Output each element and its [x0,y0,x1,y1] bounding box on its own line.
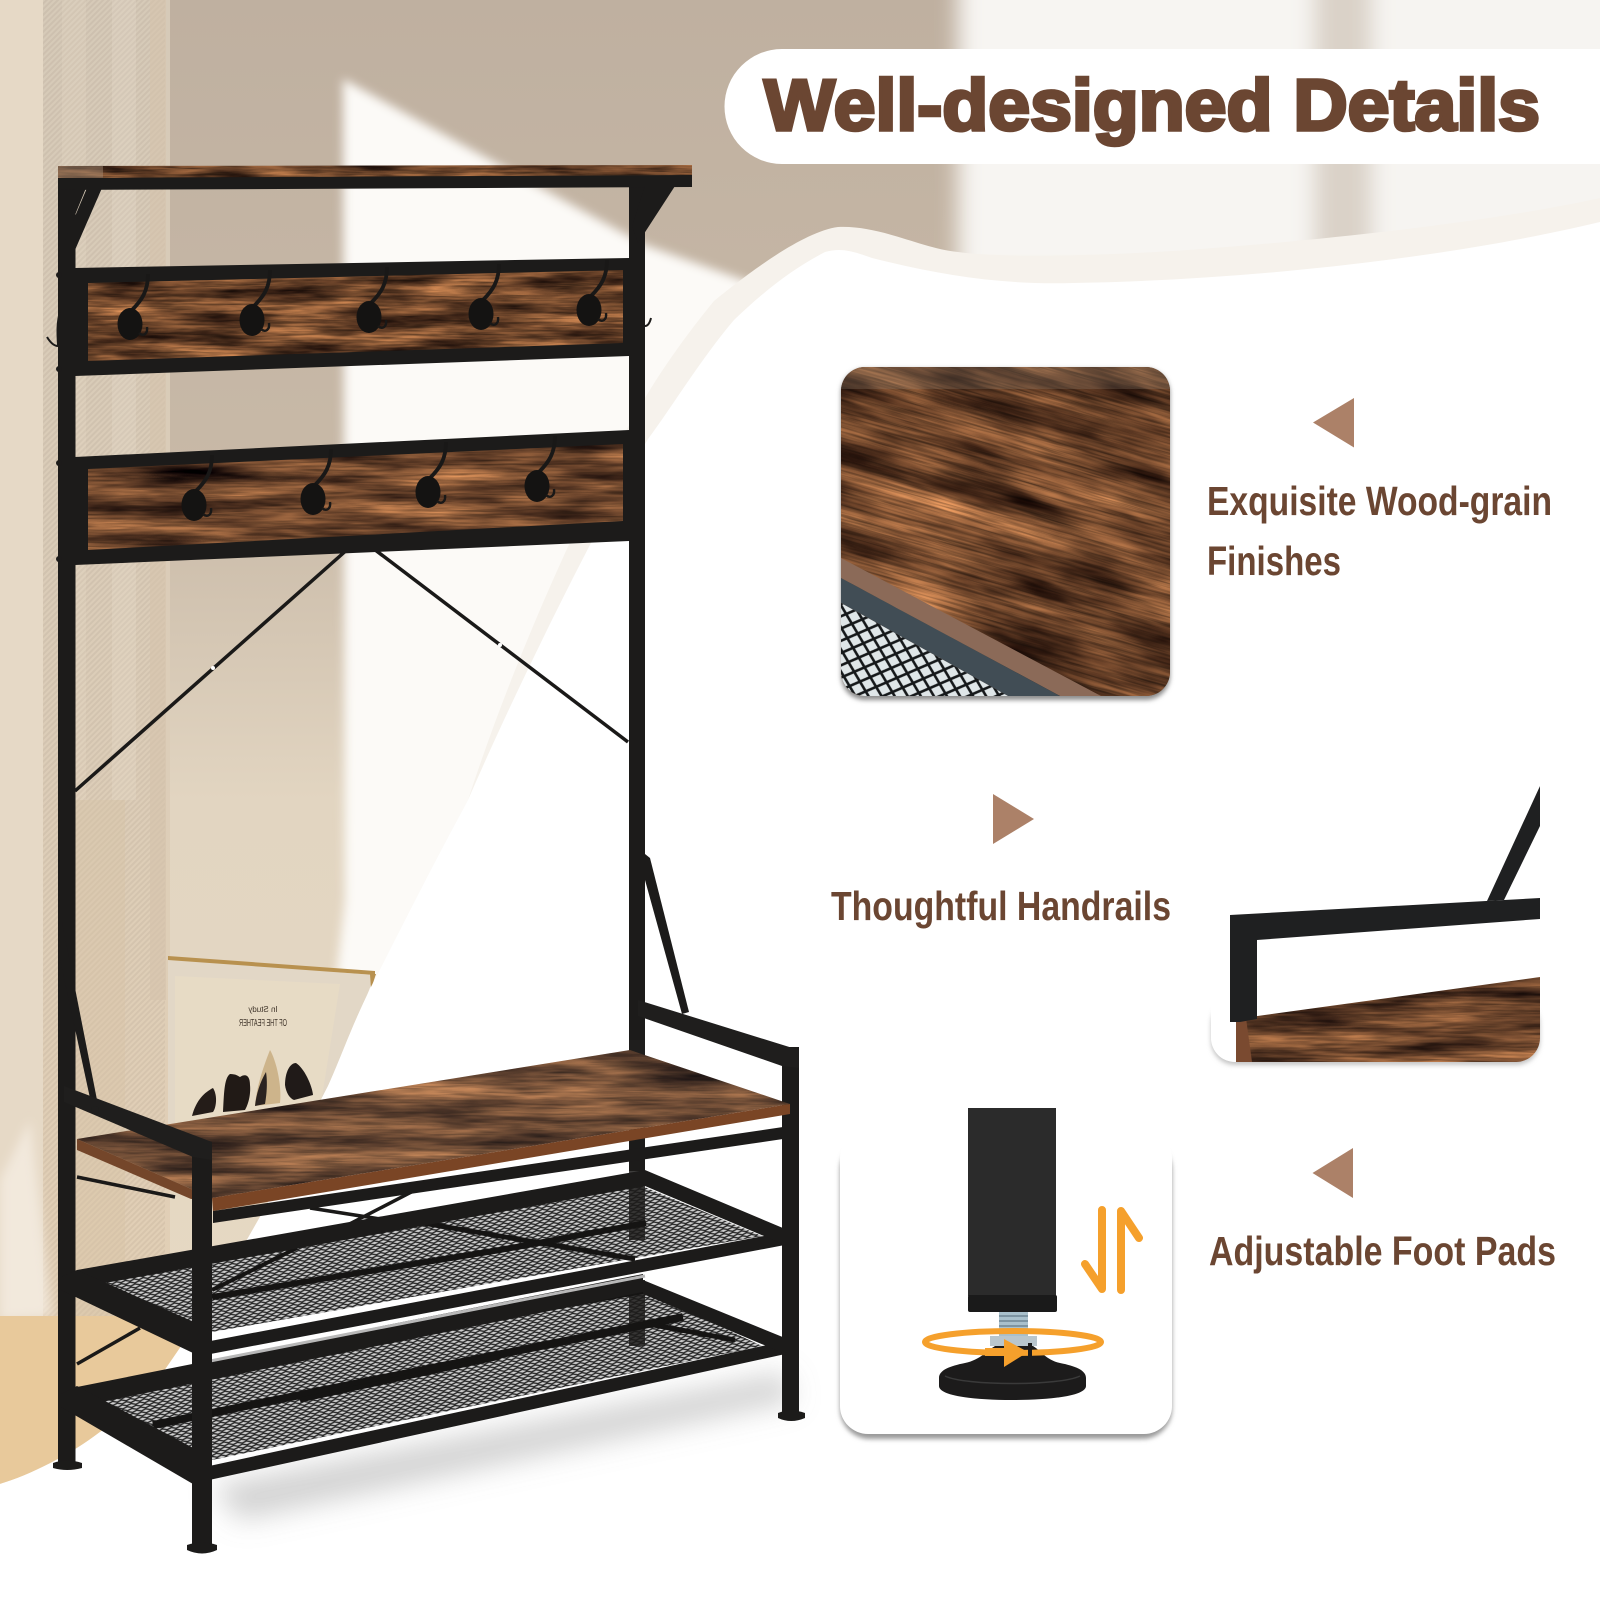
arrow: foot pads [1312,1148,1353,1198]
middle shelf [61,1170,790,1356]
left armrest [64,1086,212,1160]
poster text (mirrored): In Study [248,1005,278,1014]
poster text (mirrored): OF THE FEATHER [239,1018,287,1029]
brace [1487,786,1540,901]
floor [0,1316,345,1600]
shelf brackets [65,188,102,250]
panel: wood-grain closeup [838,366,1174,704]
threaded screw [990,1312,1037,1346]
rod bolts [211,643,502,670]
front-right leg [778,1047,805,1421]
foot base [939,1346,1086,1400]
mesh [841,603,1008,696]
curtain [0,0,170,1320]
sunlight beam on wall [322,79,800,1110]
orange up/down arrows [1085,1210,1139,1290]
orange rotate arrow [925,1331,1101,1367]
bench seat [77,1050,790,1223]
frame [841,578,1060,696]
upper hook panel [75,258,629,376]
hooks row 1 [118,260,607,340]
panel: foot pad closeup [840,1108,1556,1439]
post side bolts [56,272,62,562]
arrow: wood-grain [1313,398,1354,448]
label: handrails: Thoughtful Handrails [831,883,1171,929]
back X rods [75,546,635,1364]
armrest frame [1230,898,1540,1022]
poster leaning on wall [168,956,376,1160]
metal leg [968,1108,1057,1312]
feathers [192,1050,313,1116]
hooks row 2 [182,436,555,521]
arrow: handrails [993,794,1034,844]
lower hook panel [75,430,629,565]
wood top [58,165,692,178]
panel: handrail closeup [1211,764,1540,1065]
blurred windows upper right [958,0,1600,280]
label: wood-grain: Finishes [1207,538,1341,584]
title pill [724,49,1600,164]
rear posts [53,178,650,1470]
title: Well-designed Details [764,66,1540,146]
front-left leg [187,1142,217,1554]
top shelf [58,165,692,250]
label: wood-grain [1207,478,1552,584]
right armrest [629,1000,799,1068]
lower shelf [61,1274,790,1484]
coat rack product [47,165,805,1554]
floor shadow [212,1373,795,1520]
side hooks [47,312,651,346]
wood grain surface [841,367,1170,696]
seat wood [1236,977,1540,1062]
side braces [58,854,689,1112]
poster text (mirrored) [239,1005,287,1029]
bench edge strip [841,558,1101,696]
